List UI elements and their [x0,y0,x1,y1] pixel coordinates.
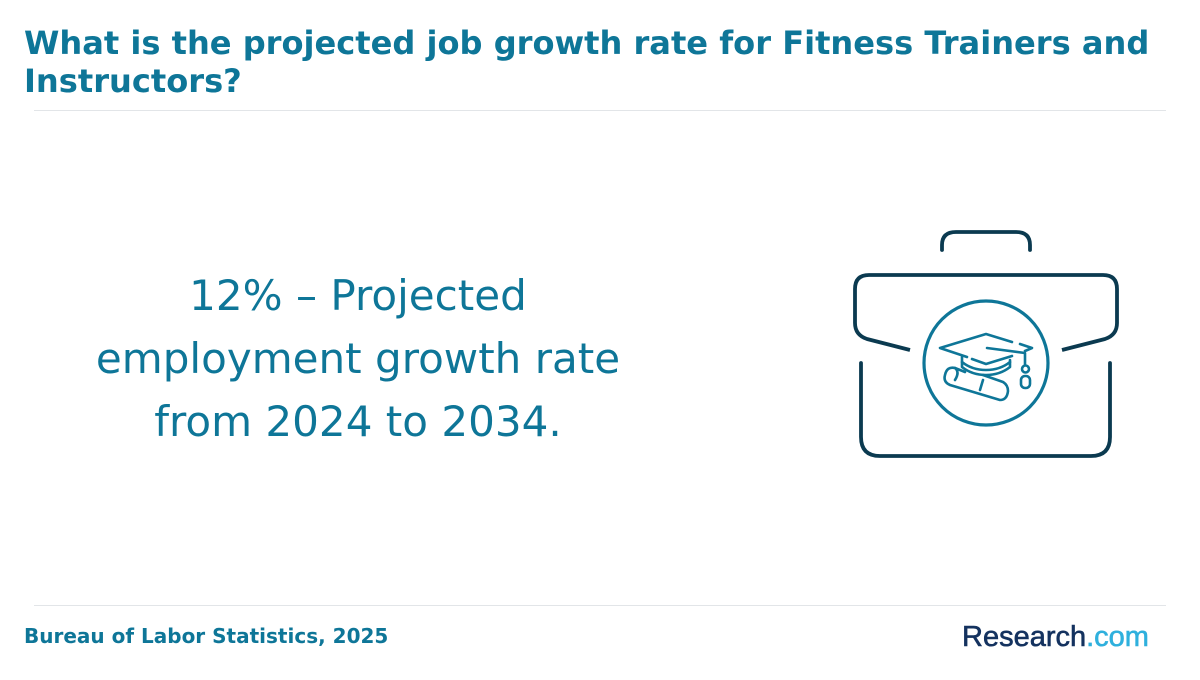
logo: Research.com: Research.com [962,621,1149,653]
icon: briefcase with graduation cap [853,230,1119,458]
briefcase outline [855,232,1117,456]
title: Instructors? [24,62,242,100]
main statistic text: from 2024 to 2034. [154,397,562,446]
source footer: Bureau of Labor Statistics, 2025 [24,624,388,648]
title: What is the projected job growth rate for Fitness Trainers and [24,24,1149,62]
main statistic text: 12% – Projected [189,271,527,320]
graduation cap badge [924,301,1048,425]
title [24,24,1149,100]
main statistic text: employment growth rate [96,334,620,383]
main statistic text [96,271,620,446]
